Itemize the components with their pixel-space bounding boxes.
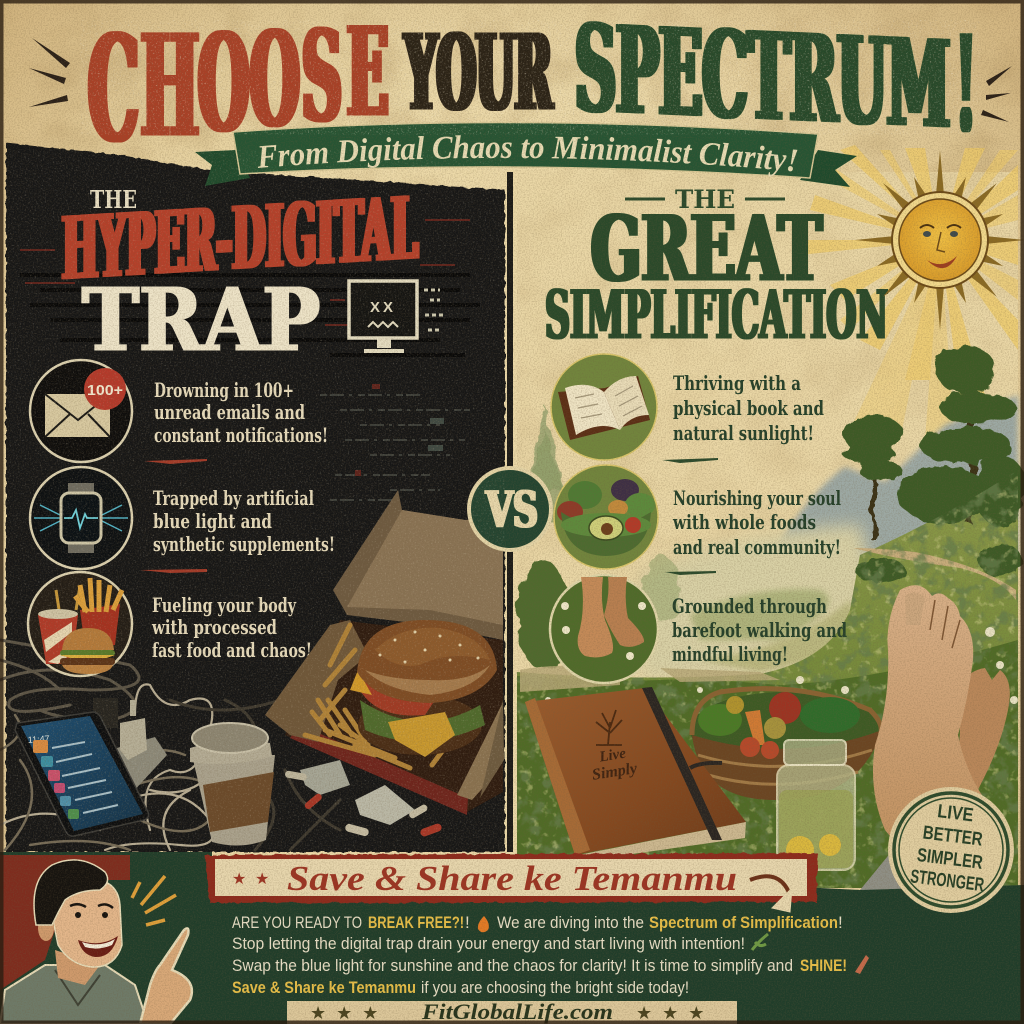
the label: THE [90,185,137,214]
footer url bar: ★★★ [310,1003,388,1024]
text: fast food: fast food and chaos! [152,639,312,662]
stamp: live better simpler stronger: BETTER [922,823,984,851]
center divider line [507,172,513,852]
illustration: trees [517,346,1024,670]
illustration: pills and crumpled foil [284,760,443,838]
item: physical book [551,354,824,460]
illustration: coffee cup [190,723,275,846]
great: GREAT [591,196,822,302]
vs badge: VS [485,480,538,539]
burst right [981,66,1012,122]
text: blue light: blue light and [153,510,272,533]
caption text: Spectrum of Simplification [649,913,838,932]
footer url bar [287,999,737,1024]
choose: H [141,3,199,169]
illustration: raised bare feet [860,585,1010,890]
caption text: BREAK FREE?! [368,913,464,932]
hair [34,860,108,925]
stamp: live better simpler stronger: STRONGER [909,866,985,896]
bottom panel [0,852,1024,1024]
text: barefoot: mindful living! [672,643,788,666]
text: emails: unread emails and [154,401,305,424]
text: whole foods: Nourishing your soul [673,487,841,510]
the label: THE [675,185,735,214]
features [75,912,81,918]
icon: envelope with badge [30,360,132,462]
item: blue light [30,467,335,569]
illustration: basket of vegetables [690,689,882,800]
icon: smartwatch [30,467,132,569]
divider [662,458,718,463]
caption text [232,913,869,997]
choose: C [88,3,139,175]
arrow [750,876,790,895]
text: emails: constant notifications! [154,424,328,447]
banner: save and share: ★ [232,869,246,888]
burst lines [132,876,176,925]
stamp: live better simpler stronger: LIVE [936,801,975,826]
illustration: hillside [517,470,1018,888]
footer url bar: ★★★ [636,1003,714,1024]
finger and hand [140,928,192,1024]
caption text: Stop letting the digital trap drain your energy and start living with intention! [232,934,745,953]
divider [140,569,207,573]
icon: smiling sun [855,150,1024,330]
icon: broken monitor [349,281,443,353]
stamp: live better simpler stronger [888,787,1014,913]
icon: salad bowl [554,465,658,569]
choose: S [302,2,342,150]
text: blue light: Trapped by artificial [153,487,314,510]
illustration: pointing man [0,860,192,1024]
choose: O [198,6,249,162]
illustration: dirt path [853,548,1016,600]
icon: burger, fries and soda [28,572,132,676]
shirt [0,965,148,1024]
text: book: natural sunlight! [673,422,814,445]
title: choose your spectrum: YOUR [405,11,553,134]
panel: the great simplification [517,145,1024,890]
paper grain overlay [80,20,980,135]
banner text: Save & Share ke Temanmu [287,859,737,898]
glitch noise lines [20,220,480,500]
illustration: glass jar [777,740,855,870]
illustration: smartphone [15,712,148,836]
illustration: smartphone: 11:47 [27,733,50,745]
ribbon subtitle [195,122,857,187]
engraved title: Simply [591,760,639,784]
title: choose your spectrum: ! [958,7,974,162]
illustration: journal [525,687,746,860]
vs badge [467,466,553,552]
box base [285,620,503,812]
caption text: ! [465,913,470,932]
illustration: burger box [265,490,504,815]
icon: envelope with badge: 100+ [87,382,123,399]
heading: the great simplification [545,185,888,354]
illustration: meadow [517,640,1018,888]
text: barefoot: barefoot walking and [672,619,847,642]
icon: broken monitor: XX [370,299,396,316]
divider [144,459,207,464]
text: emails: Drowning in 100+ [154,379,294,402]
divider [665,571,716,575]
title: choose your spectrum [29,0,1012,175]
heading: the hyper-digital trap [62,178,418,371]
icon: open book [551,354,657,460]
text: blue light: synthetic supplements! [153,533,335,556]
text: whole foods: with whole foods [672,511,816,534]
box lid [333,490,503,640]
caption text: SHINE! [800,956,847,975]
text: book: Thriving with a [673,372,801,395]
illustration: sun rays [800,145,1018,440]
choose [88,1,388,175]
banner: save and share: ★ [255,869,269,888]
panel: the hyper-digital trap [0,143,505,852]
illustration: misty valley [640,525,885,680]
icon: bare feet in grass [550,575,658,683]
text: book: physical book and [673,397,824,420]
text: barefoot: Grounded through [672,595,827,618]
caption text: We are diving into the [497,913,644,932]
neck and head [55,950,100,985]
caption text: ! [838,913,843,932]
item: barefoot [550,575,847,683]
tree emboss [596,710,622,745]
illustration: far mountains [775,395,1018,570]
illustration: tangled cables [0,640,340,850]
trap: TRAP [82,270,320,371]
choose: O [250,3,300,156]
choose: E [347,1,388,145]
item: whole foods [554,465,841,569]
banner: save and share [205,853,818,912]
website: FitGlobalLife.com [421,999,613,1024]
caption text: Swap the blue light for sunshine and the chaos for clarity! It is time to simplify and [232,956,793,975]
engraved title: Live [597,745,627,766]
caption text: Save & Share ke Temanmu [232,978,416,997]
patty and fillings [358,695,482,755]
panel: the hyper-digital trap: HYPER-DIGITAL [62,178,418,300]
stamp: live better simpler stronger: SIMPLER [916,845,984,874]
caption text: ARE YOU READY TO [232,913,362,932]
caption text: if you are choosing the bright side today! [421,978,689,997]
text: fast food: with processed [151,616,277,639]
item: fast food [28,572,312,676]
burst left [29,38,70,107]
item: unread emails [30,360,328,462]
fries [305,625,452,768]
wrap paper [265,620,368,742]
top bun [357,620,497,703]
text: whole foods: and real community! [673,536,841,559]
subtitle text: From Digital Chaos to Minimalist Clarity! [258,135,798,176]
text: fast food: Fueling your body [152,594,296,617]
illustration: charger and power strip [93,698,167,795]
